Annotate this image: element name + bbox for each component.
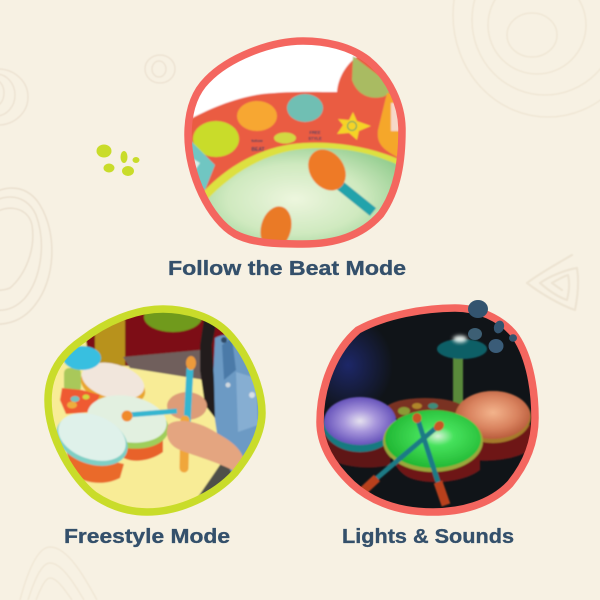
- photo: glowing drums in the dark: [324, 312, 532, 508]
- decorative contour rings top right: [453, 0, 600, 117]
- green background ball: [142, 312, 202, 334]
- decorative contour rings upper left: [0, 69, 28, 125]
- lower mallet head: [260, 206, 292, 240]
- photo: child playing drums: [52, 312, 258, 508]
- photo: toy drum close-up: [192, 44, 398, 240]
- lime border: [48, 309, 262, 512]
- cymbal stem: [453, 355, 463, 405]
- mallet head: [307, 148, 347, 192]
- purple drum: [323, 397, 397, 468]
- upper hand: [167, 392, 207, 420]
- decorative small ring: [145, 55, 175, 83]
- dark table corner: [198, 464, 232, 496]
- button label free style: FREE: [309, 130, 321, 135]
- decorative large contour left: [0, 188, 52, 324]
- child denim jacket: [212, 334, 258, 472]
- panel: follow the beat photo: [180, 35, 412, 253]
- green drum: [383, 410, 483, 482]
- teal side block: [192, 140, 216, 191]
- cymbal: [437, 339, 487, 359]
- lime paint dots: [96, 144, 140, 176]
- background wall: [85, 314, 226, 380]
- heading: lights and sounds: Lights & Sounds: [342, 525, 514, 548]
- photo: toy drum close-up: BEAT: [251, 147, 265, 153]
- coral border: [320, 308, 535, 512]
- left drum: [56, 412, 129, 484]
- mallet stick: [337, 183, 373, 212]
- control panel: [60, 388, 100, 414]
- panel: freestyle photo: [40, 300, 270, 520]
- hair: [200, 318, 216, 418]
- photo: toy drum close-up: STYLE: [308, 136, 322, 141]
- crossed stick two: [363, 419, 446, 491]
- coral border: [188, 41, 402, 244]
- vertical stick: [184, 356, 196, 468]
- navy paint dots: [468, 300, 517, 353]
- lower hand and arm: [167, 421, 244, 472]
- heading: follow the beat mode: Follow the Beat Mode: [168, 257, 406, 280]
- horizontal stick: [128, 411, 177, 415]
- icon: green cup: [352, 56, 395, 98]
- button label follow the beat: follow: [251, 138, 264, 143]
- star with power icon: [337, 112, 371, 140]
- decorative arcs bottom left: [20, 547, 97, 600]
- small lime switch: [274, 132, 296, 144]
- lime button: [193, 121, 239, 157]
- back drum: [80, 361, 146, 400]
- drum pad: [204, 142, 397, 199]
- heading: freestyle mode: Freestyle Mode: [64, 525, 230, 548]
- crossed stick one: [412, 413, 446, 505]
- orange button: [237, 101, 277, 131]
- cymbal stem: [64, 368, 81, 392]
- icon: orange block: [376, 92, 398, 158]
- teal button: [287, 94, 323, 122]
- cymbal: [63, 346, 101, 370]
- control panel: [387, 397, 460, 420]
- right drum: [86, 396, 169, 462]
- orange drum: [455, 391, 532, 461]
- decorative triangle spiral: [527, 255, 578, 310]
- panel: lights and sounds photo: [303, 300, 540, 520]
